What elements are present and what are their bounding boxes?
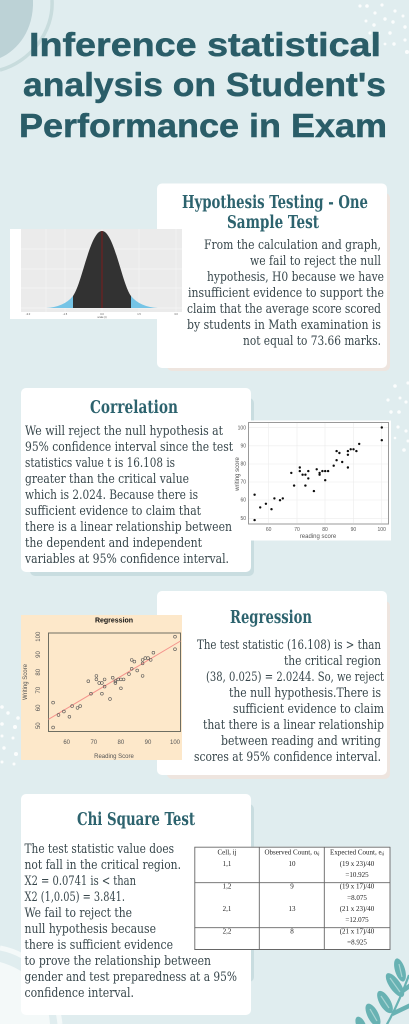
heading: chi square test: Chi Square Test	[77, 810, 195, 830]
chart: normal distribution curve: scale (t)	[97, 315, 107, 319]
text: correlation conclusion	[24, 424, 234, 567]
chart: normal distribution curve: 3.0	[174, 312, 178, 316]
table: observed and expected counts	[194, 847, 390, 950]
table: observed and expected counts: =8.925	[347, 939, 367, 947]
chart: regression plot: 70	[36, 686, 42, 693]
text: correlation conclusion: there is a linear relationship between	[25, 520, 233, 535]
chart: normal distribution curve: 0.0	[100, 312, 104, 316]
chart: regression plot: 80	[36, 668, 42, 676]
text: chi square conclusion: to prove the relationship between	[24, 954, 212, 969]
title: Performance in Exam	[19, 107, 387, 144]
chart: regression plot: 50	[36, 722, 42, 729]
chart: regression plot: 70	[90, 740, 98, 746]
title: analysis on Student's	[23, 66, 386, 103]
chart: scatter plot reading vs writing: 70	[294, 527, 300, 533]
table: observed and expected counts: (21 x 17)/40	[340, 928, 375, 936]
text: regression conclusion: sufficient evidence to claim	[233, 702, 384, 717]
text: chi square conclusion: not fall in the critical region.	[24, 858, 181, 873]
chart: scatter plot reading vs writing: 100	[238, 426, 246, 432]
table: observed and expected counts: =10.925	[345, 871, 369, 879]
chart: scatter plot reading vs writing: 50	[240, 516, 246, 522]
text: hypothesis conclusion: not equal to 73.66 marks.	[243, 334, 381, 349]
chart: scatter plot reading vs writing: writing score	[235, 457, 241, 492]
chart: regression plot: 60	[36, 704, 42, 711]
decoration: top-left circle and ring	[0, 0, 52, 70]
decoration: bottom-right leaf	[353, 957, 409, 1024]
chart: regression plot: Reading Score	[94, 754, 135, 760]
table: observed and expected counts: (21 x 23)/40	[340, 905, 375, 913]
text: chi square conclusion: there is sufficient evidence	[24, 938, 173, 953]
table: observed and expected counts: =8.075	[347, 894, 367, 902]
table: observed and expected counts: Cell, ij	[217, 848, 237, 856]
chart: scatter plot reading vs writing: 70	[240, 480, 246, 486]
text: chi square conclusion: X2 = 0.0741 is < than	[24, 874, 136, 889]
heading: hypothesis testing	[182, 193, 368, 233]
chart: scatter plot reading vs writing: 60	[240, 498, 246, 504]
text: hypothesis conclusion	[187, 238, 384, 349]
chart: regression plot: 60	[63, 740, 71, 746]
chart: scatter plot reading vs writing: 80	[240, 462, 246, 468]
chart: regression plot: 80	[118, 740, 125, 746]
text: correlation conclusion: greater than the critical value	[25, 472, 189, 487]
table: observed and expected counts: 8	[290, 928, 294, 936]
text: chi square conclusion: We fail to reject the	[24, 906, 132, 921]
table: observed and expected counts: (19 x 23)/40	[340, 860, 375, 868]
text: correlation conclusion: the dependent and independent	[25, 536, 203, 551]
text: chi square conclusion: null hypothesis because	[24, 922, 156, 937]
table: observed and expected counts: 9	[290, 883, 294, 891]
text: correlation conclusion: variables at 95% confidence interval.	[24, 552, 229, 567]
title: Inference statistical	[29, 26, 381, 63]
text: correlation conclusion: which is 2.024. Because there is	[25, 488, 198, 503]
text: correlation conclusion: We will reject the null hypothesis at	[25, 424, 224, 439]
chart: scatter plot reading vs writing: reading score	[300, 534, 337, 540]
text: chi square conclusion: gender and test preparedness at a 95%	[24, 970, 237, 985]
chart: scatter plot reading vs writing: 100	[378, 527, 386, 533]
chart: regression plot: 90	[36, 651, 42, 658]
table: observed and expected counts: 1,1	[223, 860, 232, 868]
text: regression conclusion: the null hypothesis.There is	[229, 686, 381, 701]
chart: regression plot: Writing Score	[23, 663, 29, 700]
decoration: right middle dots	[386, 381, 409, 452]
chart: regression plot: Regression	[95, 618, 133, 624]
text: regression conclusion	[194, 638, 385, 765]
chart: scatter plot reading vs writing: 80	[322, 527, 328, 533]
decoration: top-right dots	[358, 3, 409, 54]
chart: normal distribution curve: -1.5	[63, 312, 68, 316]
heading: hypothesis testing: Sample Test	[227, 213, 319, 233]
heading: correlation: Correlation	[90, 398, 178, 418]
text: chi square conclusion	[24, 842, 237, 1001]
text: correlation conclusion: sufficient evidence to claim that	[25, 504, 202, 519]
title	[19, 26, 387, 144]
chart: scatter plot reading vs writing	[235, 420, 391, 540]
chart: normal distribution curve: 1.5	[137, 312, 141, 316]
text: regression conclusion: the critical region	[284, 654, 382, 669]
text: hypothesis conclusion: we fail to reject the null	[250, 254, 381, 269]
table: observed and expected counts: Expected Count, eᵢⱼ	[330, 848, 384, 856]
text: correlation conclusion: statistics value t is 16.108 is	[25, 456, 175, 471]
text: correlation conclusion: 95% confidence interval since the test	[25, 440, 234, 455]
table: observed and expected counts: =12.075	[345, 916, 369, 924]
chart: regression plot: 100	[170, 740, 181, 746]
table: observed and expected counts: 2,1	[223, 905, 232, 913]
decoration: bottom-left white circle and arc	[0, 948, 60, 1024]
table: observed and expected counts: 1,2	[223, 883, 232, 891]
text: chi square conclusion: The test statistic value does	[24, 842, 174, 857]
table: observed and expected counts: 13	[288, 905, 296, 913]
chart: scatter plot reading vs writing: 90	[351, 527, 356, 533]
chart: regression plot: 90	[145, 740, 152, 746]
panel: hypothesis testing	[157, 184, 390, 371]
text: chi square conclusion: confidence interval.	[24, 986, 134, 1001]
heading: regression: Regression	[230, 608, 312, 628]
table: observed and expected counts: 10	[288, 860, 296, 868]
decoration: left dots	[0, 705, 20, 766]
chart: regression plot: 100	[36, 631, 42, 642]
chart: normal distribution curve: -3.0	[26, 312, 31, 316]
table: observed and expected counts: Observed Count, oᵢⱼ	[264, 848, 320, 856]
chart: normal distribution curve	[10, 229, 182, 319]
text: chi square conclusion: X2 (1,0.05) = 3.841.	[24, 890, 125, 905]
panel: correlation	[21, 388, 254, 576]
chart: scatter plot reading vs writing: 60	[266, 527, 272, 533]
panel: regression	[157, 591, 390, 779]
panel: chi square test	[21, 794, 254, 1015]
chart: regression plot	[21, 615, 182, 760]
table: observed and expected counts: 2,2	[223, 928, 232, 936]
text: regression conclusion: between reading and writing	[221, 734, 381, 749]
chart: scatter plot reading vs writing: 90	[240, 444, 246, 450]
table: observed and expected counts: (19 x 17)/40	[340, 883, 375, 891]
